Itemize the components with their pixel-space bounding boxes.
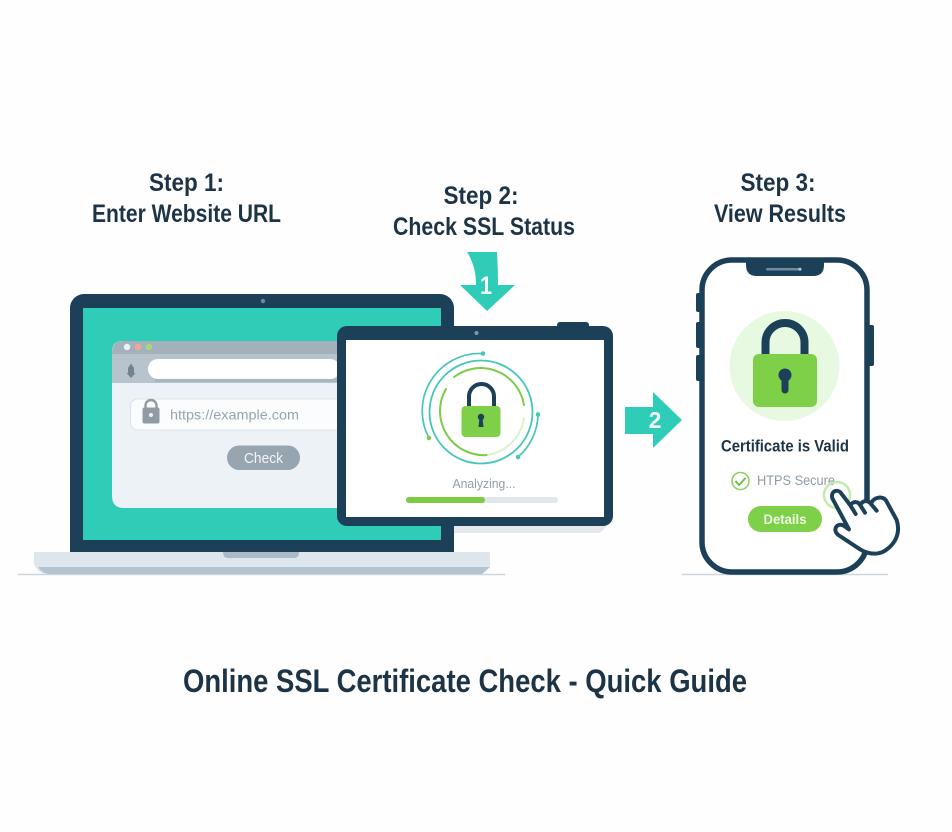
scanning rings [422,352,540,464]
icon: check mark [732,472,749,490]
tablet body [337,326,613,526]
icon: pointing hand [832,491,898,554]
details button [748,506,822,532]
analyzing label: Analyzing... [452,477,516,491]
toolbar icon [126,364,136,378]
progress bar [406,497,558,503]
icon: green padlock, valid [753,323,817,407]
heading: step 1: Enter Website URL [92,200,281,228]
heading: step 2: Check SSL Status [393,213,575,241]
url text: https://example.com [170,406,299,422]
arrow 1 [460,252,515,311]
certificate valid text: Certificate is Valid [721,438,849,456]
tablet power button [557,322,589,330]
heading: step 3: Step 3: [740,169,816,197]
arrow 2: 2 [649,407,661,433]
laptop [34,252,898,699]
laptop screen [83,308,441,540]
phone notch [746,259,824,276]
tablet shadow [454,526,607,533]
light green circle [730,311,840,421]
heading: step 2 [393,182,575,241]
footer title: Online SSL Certificate Check - Quick Guide [183,663,747,699]
heading: step 3: View Results [714,200,846,228]
phone body [702,260,867,572]
arrow 1: 1 [480,272,492,300]
url input field [130,399,346,430]
check button [227,446,300,470]
tablet camera [474,331,478,335]
heading: step 2: Step 2: [444,182,518,210]
details button: Details [764,511,807,527]
window control dots [124,344,152,350]
arrow 2 [625,392,682,448]
tap ripple [824,482,850,508]
browser window [112,341,346,508]
heading: step 3 [714,169,846,228]
tablet [337,322,613,533]
smartphone [696,259,874,572]
laptop lid [70,294,454,553]
icon: green padlock, analyzing [462,384,500,437]
heading: step 1: Step 1: [149,169,224,197]
laptop base [34,552,490,574]
icon: grey padlock [142,400,160,424]
check button: Check [244,451,284,467]
laptop camera [261,299,265,303]
phone speaker [766,268,802,271]
heading: step 1 [92,169,281,228]
https secure text: HTPS Secure [757,473,835,488]
tablet screen [346,340,604,517]
phone side buttons [696,293,874,381]
